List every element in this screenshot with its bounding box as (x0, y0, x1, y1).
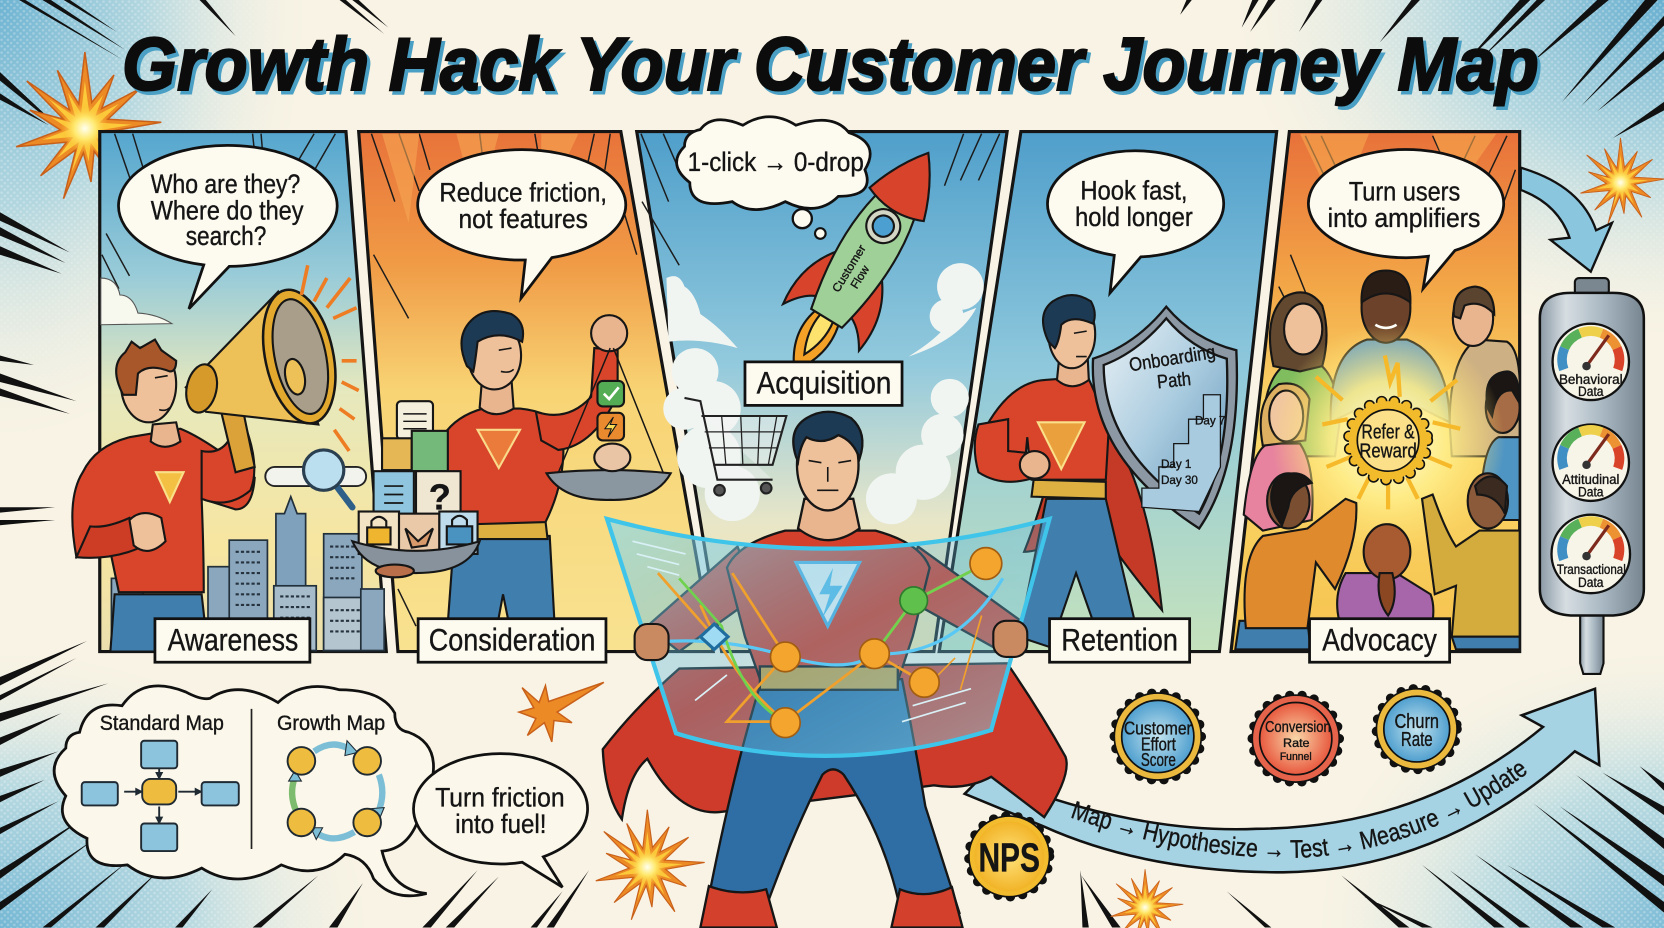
cape (603, 663, 1067, 819)
hands gripping the map (635, 621, 1027, 660)
gauge: behavioral data: Behavioral (1559, 372, 1623, 387)
label: retention: Retention (1061, 622, 1178, 658)
starburst: top right (1580, 138, 1664, 224)
refer and reward burst: Refer & (1362, 421, 1415, 443)
retention hero (975, 295, 1162, 652)
refer and reward burst (1271, 324, 1505, 557)
thought bubble: 1-click: 1-click → 0-drop (688, 147, 864, 177)
speech bubble: reduce friction: Reduce friction, (439, 178, 607, 208)
metric badge: conversion: Funnel (1280, 751, 1312, 763)
metric badge: churn rate: Churn (1394, 711, 1439, 733)
gauge: behavioral data (1553, 324, 1629, 400)
speech bubble: turn users: Turn users (1349, 177, 1460, 207)
metric badge: customer effort score (1114, 693, 1201, 780)
tank body (1540, 293, 1644, 616)
speech bubble: turn users (1308, 149, 1504, 289)
title: Growth Hack Your Customer Journey Map (125, 25, 1542, 109)
speech bubble: hook fast: hold longer (1075, 202, 1193, 232)
balance scale (547, 348, 671, 500)
central hero holding the map (603, 412, 1067, 928)
starburst: map side (519, 682, 604, 742)
starburst: top left (16, 52, 161, 199)
tank stem (1580, 613, 1604, 674)
gauge: transactional data (1552, 515, 1630, 593)
rocket (755, 129, 967, 395)
curved process arrow: Map → Hypothesize → Test → Measure → Update (1071, 764, 1526, 858)
metric badge: NPS: NPS (978, 834, 1040, 880)
crowd: front row (1235, 473, 1520, 649)
speech bubble: who are they: Who are they? (151, 169, 300, 199)
speech bubble: hook fast (1048, 151, 1224, 293)
speech bubble: reduce friction (418, 150, 626, 298)
hero with scale (440, 311, 627, 652)
label: acquisition: Acquisition (757, 365, 891, 401)
cloud: standard vs growth map (54, 686, 434, 896)
city skyline (111, 497, 384, 651)
torso (727, 531, 930, 684)
cloud: standard vs growth map: Growth Map (277, 712, 385, 735)
refer and reward burst: Reward (1359, 440, 1417, 462)
speech bubble: hook fast: Hook fast, (1080, 176, 1188, 206)
panel: retention (939, 132, 1277, 652)
metric badge: churn rate: Rate (1401, 729, 1433, 751)
map nodes (700, 548, 1002, 738)
speech bubble: who are they (119, 145, 337, 309)
metric badge: conversion (1252, 695, 1339, 782)
speech bubble: turn friction into fuel: Turn friction (435, 783, 565, 813)
clouds (663, 263, 984, 524)
metric badge: customer effort score: Effort (1141, 734, 1176, 754)
megaphone (182, 283, 347, 472)
arms (647, 547, 1021, 652)
search bar and magnifying glass (265, 450, 366, 507)
shopping cart (684, 398, 786, 496)
curved arrow into data tank (1521, 168, 1612, 272)
label: advocacy: Advocacy (1322, 622, 1437, 658)
speech bubble: turn users: into amplifiers (1328, 203, 1480, 233)
starburst: bottom center (596, 810, 705, 920)
speech bubble: turn friction into fuel (414, 754, 588, 887)
metric badge: customer effort score: Customer (1124, 718, 1192, 738)
shield: onboarding path (1093, 307, 1237, 528)
title: Growth Hack Your Customer Journey Map (122, 22, 1539, 106)
rocket: Customer (830, 243, 869, 295)
panel: advocacy (1231, 132, 1520, 652)
panel: consideration (352, 132, 713, 652)
gauge: behavioral data: Data (1578, 384, 1604, 399)
starburst: bottom right (1111, 869, 1183, 928)
shield: onboarding path: Onboarding (1128, 342, 1217, 376)
cloud: standard vs growth map: Standard Map (100, 712, 224, 735)
stack of blocks on a tray (352, 401, 480, 577)
metric badge: customer effort score: Score (1141, 750, 1176, 770)
chest emblem (796, 562, 860, 626)
head (793, 412, 862, 540)
metric badge: churn rate (1376, 689, 1457, 769)
gauge: attitudinal data: Attitudinal (1562, 472, 1619, 487)
speech bubble: turn friction into fuel: into fuel! (455, 809, 547, 839)
legs and boots (700, 679, 963, 928)
shield: onboarding path: Day 7 (1195, 414, 1225, 427)
panel: acquisition (637, 117, 1007, 652)
speech bubble: who are they: Where do they (151, 196, 304, 226)
thought bubble: 1-click (677, 117, 870, 239)
crowd: middle row (1244, 371, 1520, 531)
shield: onboarding path: Day 30 (1161, 474, 1198, 487)
hero with megaphone (72, 340, 255, 652)
metric badge: conversion: Rate (1283, 737, 1310, 750)
gauge: transactional data: Transactional (1557, 562, 1626, 577)
label: awareness: Awareness (168, 622, 298, 658)
curved process arrow (962, 687, 1601, 874)
rocket: Flow (848, 263, 873, 291)
metric badge: NPS (969, 816, 1050, 897)
holographic journey map (607, 519, 1050, 756)
growth loop diagram (288, 741, 384, 839)
label: consideration: Consideration (429, 622, 595, 658)
crowd: back row (1263, 271, 1520, 456)
gauge: attitudinal data (1553, 424, 1629, 501)
stack of blocks on a tray: ? (429, 476, 451, 517)
tank cap (1575, 278, 1609, 295)
panel: awareness (72, 132, 386, 652)
shield: onboarding path: Day 1 (1161, 458, 1191, 471)
gauge: transactional data: Data (1578, 575, 1604, 590)
shield: onboarding path: Path (1156, 369, 1192, 393)
gauge: attitudinal data: Data (1578, 485, 1604, 500)
speech bubble: reduce friction: not features (458, 204, 588, 234)
speech bubble: who are they: search? (186, 221, 266, 251)
data tank with gauges (1540, 278, 1644, 674)
metric badge: conversion: Conversion (1265, 719, 1331, 736)
standard map diagram (82, 741, 239, 851)
cloud (101, 278, 172, 325)
